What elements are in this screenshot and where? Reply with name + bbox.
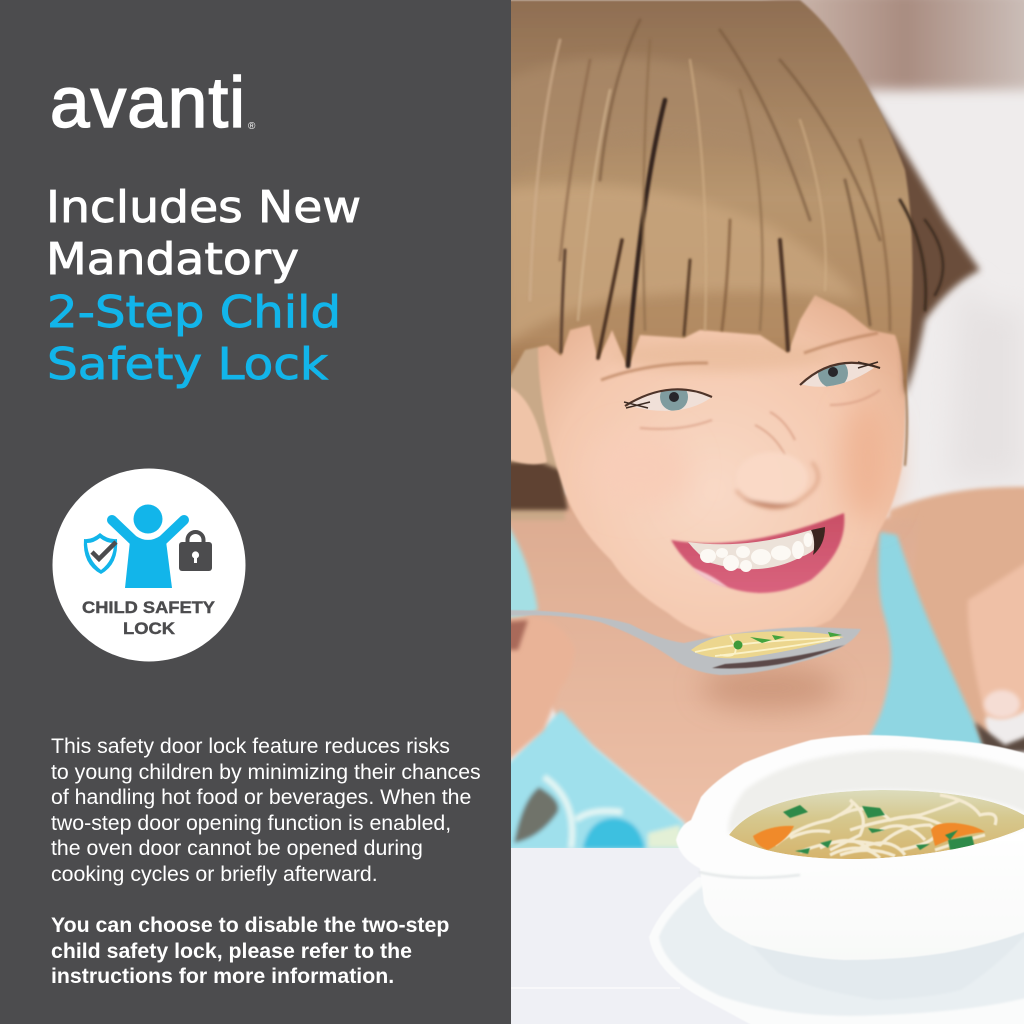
hair strands bbox=[530, 20, 943, 465]
icon: shield with check bbox=[84, 533, 117, 574]
badge: child safety lock bbox=[52, 468, 246, 662]
text block: disable note bbox=[51, 913, 449, 988]
text block: disable note: child safety lock, please refer to the bbox=[51, 938, 412, 962]
carrots bbox=[753, 826, 794, 850]
heading: includes new mandatory 2-step child safety lock: 2-Step Child bbox=[47, 287, 341, 338]
face bbox=[538, 280, 906, 642]
heading: includes new mandatory 2-step child safety lock bbox=[46, 182, 361, 390]
hair highlights bbox=[505, 57, 820, 190]
hair back bbox=[505, 462, 568, 510]
noodles bbox=[775, 795, 996, 858]
icon: padlock bbox=[179, 532, 212, 571]
noodles on spoon bbox=[691, 631, 844, 658]
neck and chest bbox=[505, 490, 920, 840]
panel: dark left column bbox=[0, 0, 511, 1024]
heading: includes new mandatory 2-step child safety lock: Mandatory bbox=[46, 234, 299, 285]
spoon bbox=[505, 610, 861, 675]
soup bbox=[729, 790, 1024, 859]
text block: feature description bbox=[51, 734, 481, 886]
logo: avanti: ® bbox=[248, 121, 256, 132]
wrinkles under eyes bbox=[640, 390, 880, 455]
plate bbox=[649, 877, 1024, 1024]
left hand bbox=[505, 617, 575, 763]
top: turquoise straps and bodice bbox=[505, 520, 986, 850]
text block: disable note: You can choose to disable the two-step bbox=[51, 913, 449, 937]
hair bbox=[505, 0, 980, 465]
text block: feature description: of handling hot food or beverages. When the bbox=[51, 785, 471, 809]
photo: smiling girl eating noodle soup bbox=[511, 0, 1024, 1024]
table bbox=[505, 848, 1024, 1024]
heading: includes new mandatory 2-step child safety lock: Safety Lock bbox=[47, 339, 329, 390]
nose bbox=[736, 452, 818, 508]
badge label: LOCK bbox=[123, 619, 176, 638]
eye: left bbox=[624, 388, 712, 411]
side hair behind ear bbox=[505, 330, 565, 520]
right hand bbox=[968, 560, 1024, 719]
text block: feature description: the oven door cannot be opened during bbox=[51, 836, 423, 860]
cheeks and forehead shading bbox=[590, 432, 690, 508]
badge label: CHILD SAFETY bbox=[82, 598, 216, 617]
background bbox=[511, 0, 1024, 1024]
text block: disable note: instructions for more information. bbox=[51, 964, 394, 988]
herbs bbox=[783, 805, 975, 854]
text block: feature description: cooking cycles or briefly afterward. bbox=[51, 862, 378, 886]
mouth bbox=[671, 513, 844, 593]
text block: feature description: to young children by minimizing their chances bbox=[51, 760, 481, 784]
bowl foot bbox=[751, 930, 1024, 1000]
eyebrows bbox=[601, 333, 878, 380]
bowl bbox=[676, 735, 1024, 960]
arm and shoulder bbox=[860, 487, 1024, 745]
eye: right bbox=[799, 361, 880, 387]
heading: includes new mandatory 2-step child safety lock: Includes New bbox=[46, 182, 361, 233]
text block: feature description: This safety door lock feature reduces risks bbox=[51, 734, 450, 758]
badge label bbox=[82, 598, 216, 638]
text block: feature description: two-step door opening function is enabled, bbox=[51, 810, 451, 834]
ear bbox=[505, 385, 547, 464]
icon: child with raised arms bbox=[112, 504, 184, 588]
